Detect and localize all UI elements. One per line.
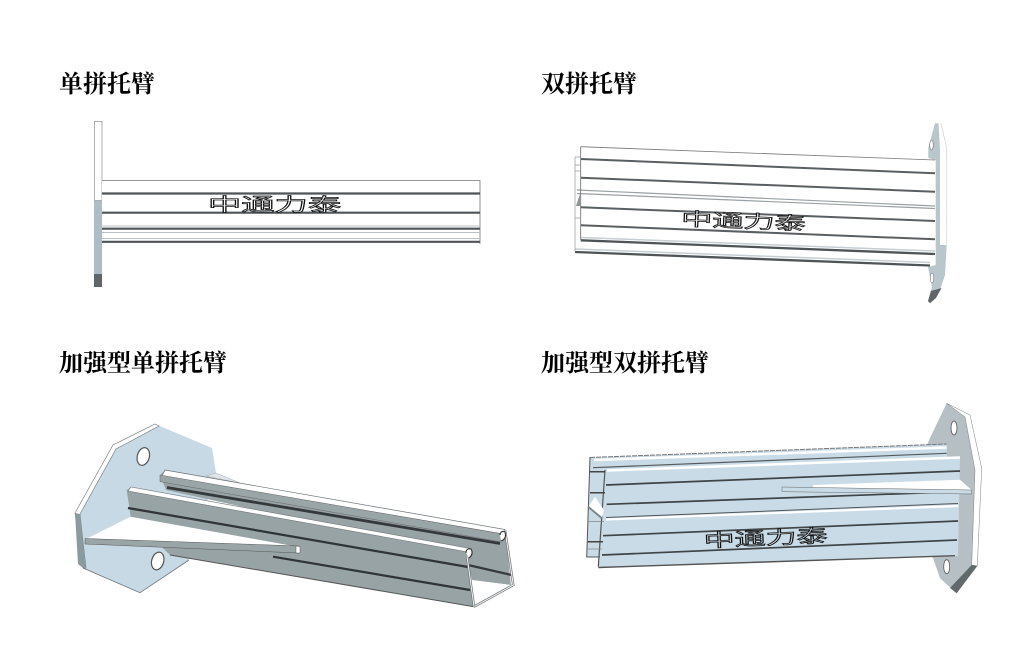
channel arm: [102, 180, 480, 244]
end opening: [468, 530, 513, 607]
channel arm: [575, 147, 935, 266]
illustration: single bracket: [94, 122, 480, 287]
gusset behind plate: [206, 473, 240, 483]
heading: single bracket: 单拼托臂: [59, 71, 155, 98]
end plate: [75, 424, 216, 593]
illustration: reinforced double bracket: [587, 403, 982, 593]
channel arms: [587, 444, 960, 568]
heading: reinforced single bracket: 加强型单拼托臂: [59, 350, 227, 377]
illustration: reinforced single bracket: [75, 424, 513, 607]
end plate: [928, 123, 947, 303]
white gusset side: [86, 517, 296, 546]
base plate: [94, 122, 102, 287]
brace: [782, 480, 972, 494]
brace: [85, 538, 300, 553]
rear channel: [160, 470, 511, 585]
heading: reinforced double bracket: 加强型双拼托臂: [541, 350, 709, 377]
brand text: 中通力泰: [681, 209, 806, 234]
brand text: 中通力泰: [208, 195, 341, 215]
end plate: [925, 403, 982, 593]
illustration: double bracket: [575, 123, 947, 303]
heading: double bracket: 双拼托臂: [541, 71, 637, 98]
front channel: [127, 487, 474, 607]
brand text: 中通力泰: [703, 526, 828, 551]
